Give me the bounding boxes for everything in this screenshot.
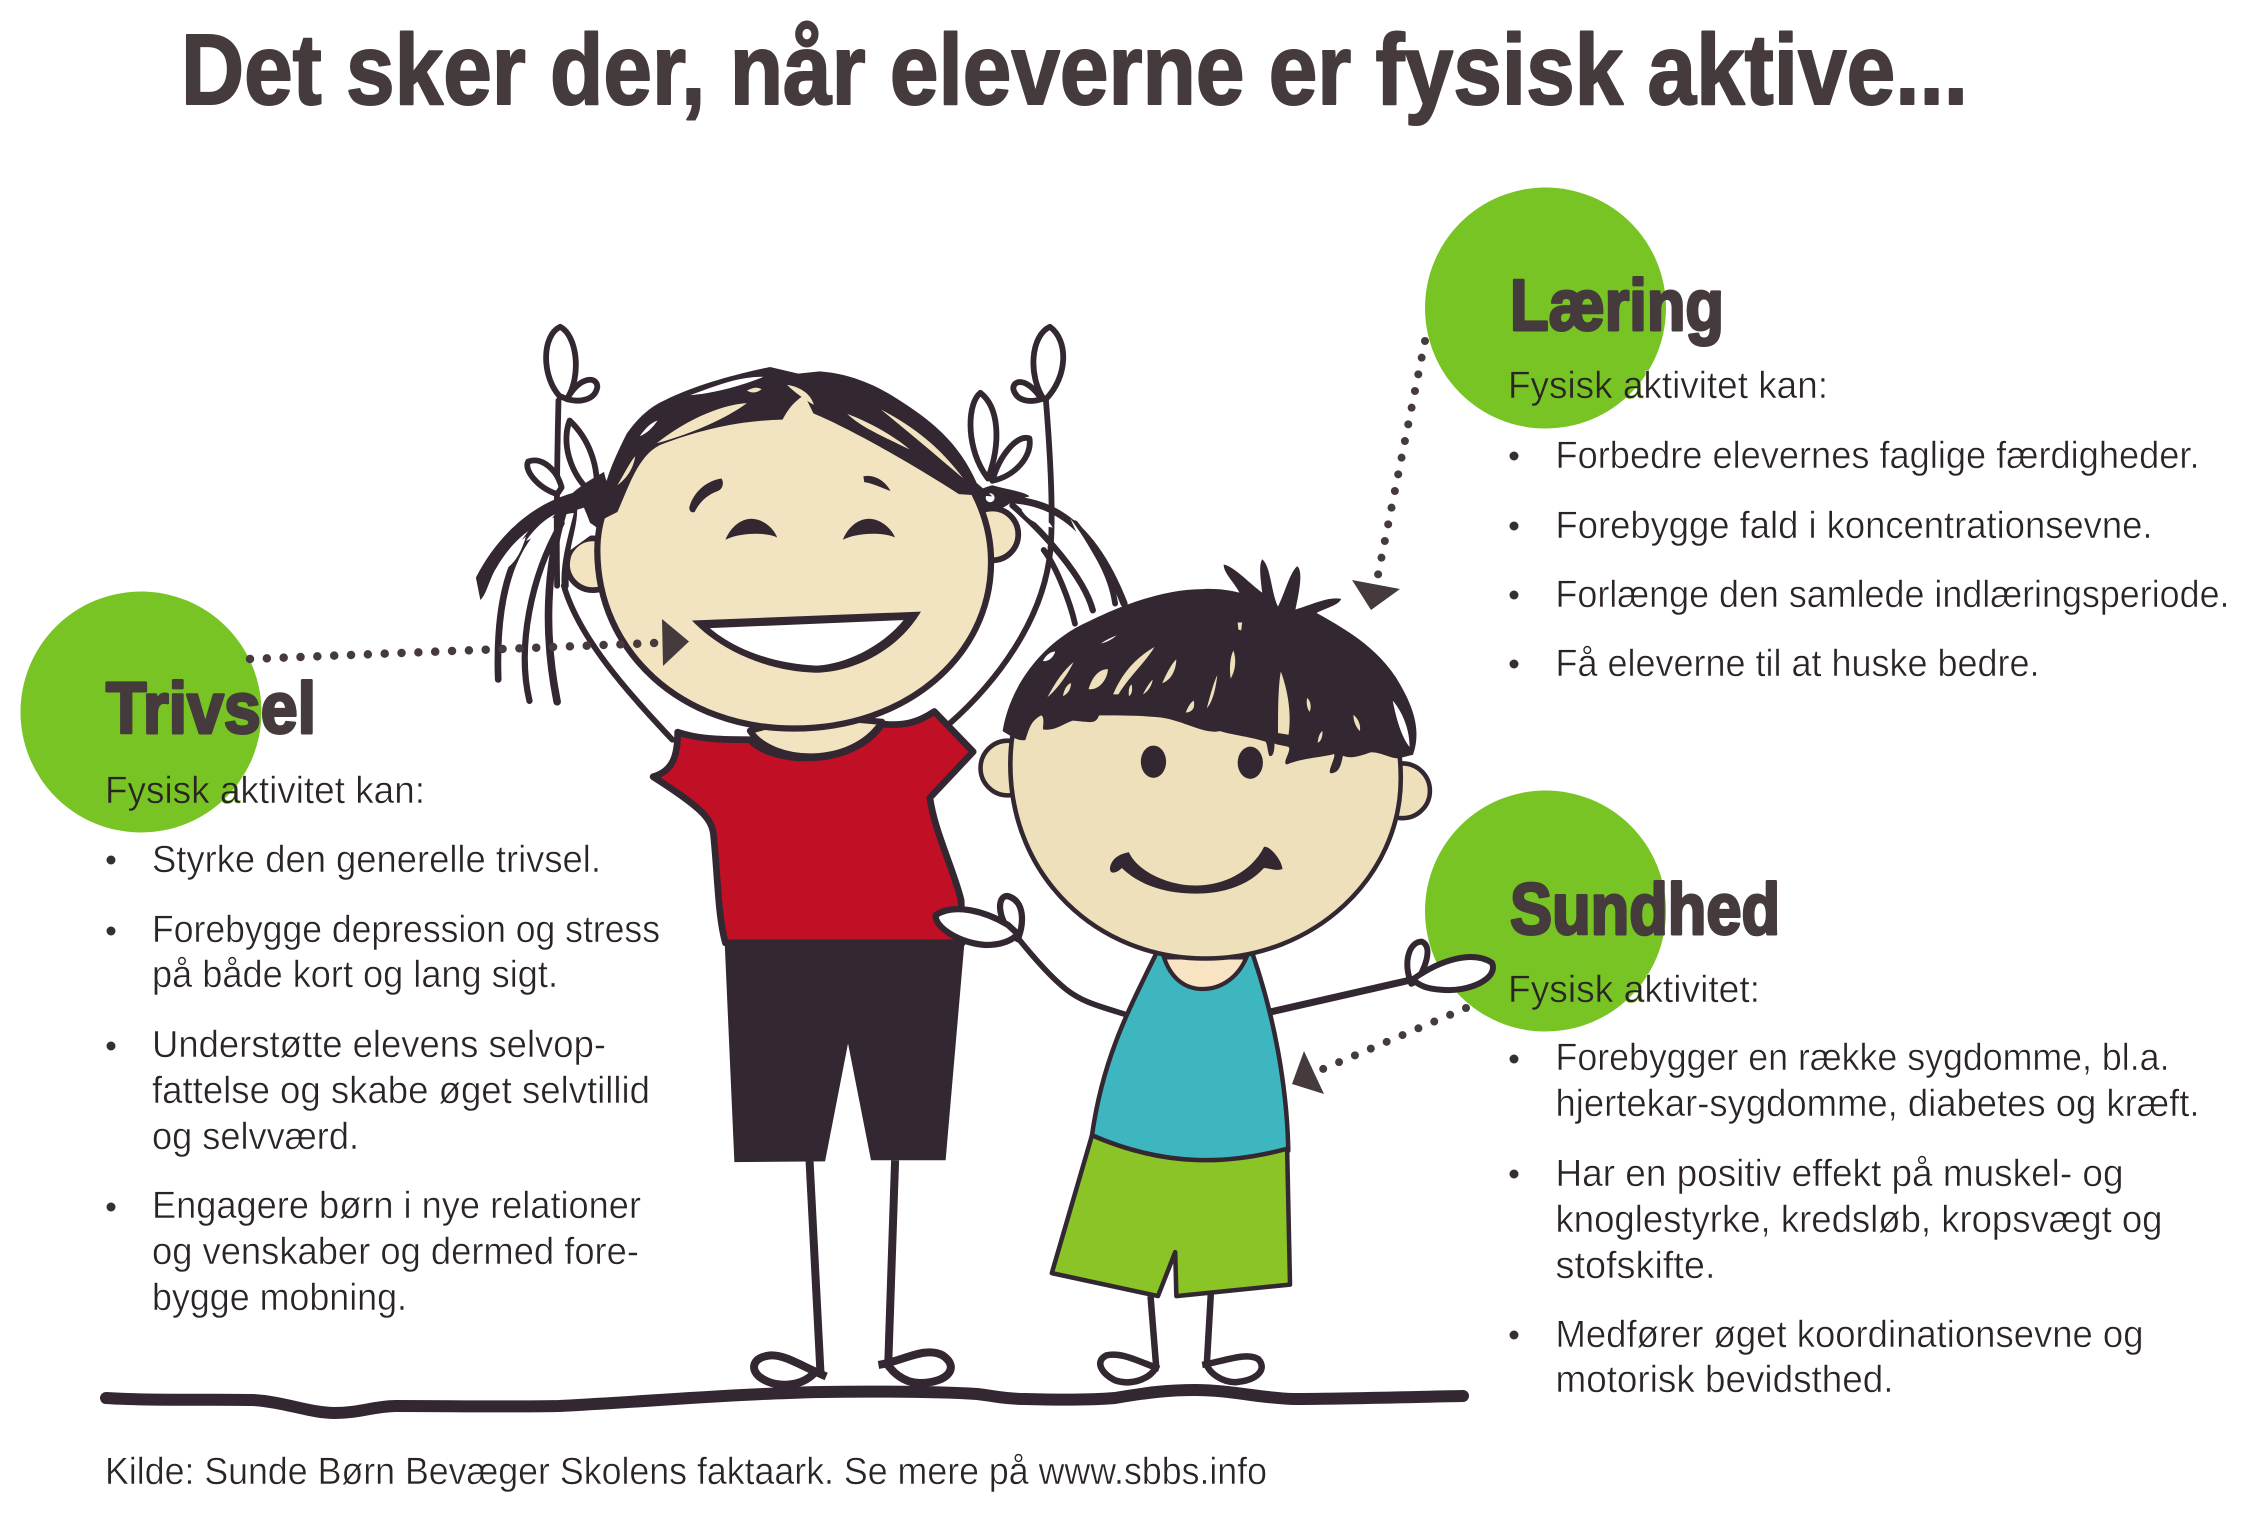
list: Trivsel: Engagere børn i nye relationer — [152, 1185, 641, 1227]
list: Trivsel: på både kort og lang sigt. — [152, 954, 558, 996]
boy smile — [1110, 847, 1283, 894]
illustration: feet and boy legs — [754, 1294, 1262, 1385]
arrow: Læring to boy — [1352, 341, 1425, 610]
list: Sundhed: Har en positiv effekt på muskel- og — [1556, 1153, 2124, 1195]
arrow: Sundhed to boy — [1292, 1008, 1466, 1094]
list: Trivsel: bygge mobning. — [152, 1277, 407, 1319]
heading: Læring: Læring — [1510, 266, 1724, 346]
girl ears — [567, 508, 1018, 590]
list: Læring: Få eleverne til at huske bedre. — [1556, 643, 2040, 685]
illustration: girl — [476, 327, 1124, 943]
boy ears — [981, 741, 1430, 818]
list: Læring: Forebygge fald i koncentrationsevne. — [1556, 505, 2152, 547]
circle: Trivsel — [20, 592, 262, 832]
boy right hand — [1407, 942, 1493, 990]
illustration: girl shorts and legs — [725, 941, 965, 1373]
list: Sundhed: stofskifte. — [1556, 1245, 1716, 1287]
intro: Trivsel: Fysisk aktivitet kan: — [105, 770, 425, 812]
list: Trivsel: og venskaber og dermed fore- — [152, 1231, 639, 1273]
girl pigtail knots — [476, 472, 1106, 600]
list: Trivsel — [152, 839, 660, 1319]
boy hair — [1003, 559, 1416, 773]
intro: Læring: Fysisk aktivitet kan: — [1508, 365, 1828, 407]
list: Trivsel: og selvværd. — [152, 1116, 359, 1158]
list: Sundhed — [1556, 1037, 2200, 1401]
list: Trivsel: fattelse og skabe øget selvtillid — [152, 1070, 650, 1112]
list: Trivsel: Styrke den generelle trivsel. — [152, 839, 601, 881]
girl mouth — [692, 612, 921, 673]
list: Sundhed: hjertekar-sygdomme, diabetes og kræft. — [1556, 1083, 2200, 1125]
girl neck — [750, 715, 882, 756]
heading: Sundhed: Sundhed — [1510, 870, 1780, 950]
list: Trivsel: Forebygge depression og stress — [152, 909, 660, 951]
girl face — [689, 476, 895, 540]
text block: Læring — [1508, 266, 2230, 685]
boy eyes — [1141, 746, 1263, 779]
list: Læring: Forbedre elevernes faglige færdigheder. — [1556, 435, 2200, 477]
girl shirt — [653, 712, 973, 943]
girl hair — [603, 367, 992, 519]
bullets: Trivsel — [106, 856, 116, 1212]
boy left hand — [936, 896, 1022, 945]
list: Læring — [1556, 435, 2230, 685]
illustration: ground line — [106, 1390, 1463, 1413]
girl head — [597, 385, 991, 729]
boy shirt — [1052, 938, 1290, 1296]
intro: Sundhed: Fysisk aktivitet: — [1508, 969, 1760, 1011]
bullets: Sundhed — [1510, 1054, 1518, 1340]
boy hair highlights — [1048, 622, 1360, 743]
list: Sundhed: Forebygger en række sygdomme, bl.a. — [1556, 1037, 2170, 1079]
title: Det sker der, når eleverne er fysisk aktive... — [181, 14, 1968, 126]
circle: Sundhed — [1425, 790, 1666, 1032]
arrow: Trivsel to girl — [250, 619, 689, 666]
bullets: Læring — [1510, 452, 1518, 668]
list: Sundhed: knoglestyrke, kredsløb, kropsvægt og — [1556, 1199, 2162, 1241]
source line: Kilde: Sunde Børn Bevæger Skolens faktaark. Se mere på www.sbbs.info — [105, 1451, 1267, 1493]
boy head shape — [1010, 610, 1401, 959]
illustration: boy — [936, 559, 1493, 1296]
heading: Trivsel: Trivsel — [106, 669, 316, 749]
text block: Sundhed — [1508, 870, 2200, 1401]
boy shorts — [1052, 1135, 1290, 1296]
boy head group — [981, 559, 1493, 990]
list: Sundhed: Medfører øget koordinationsevne og — [1556, 1314, 2144, 1356]
boy neck — [1164, 957, 1246, 989]
list: Trivsel: Understøtte elevens selvop- — [152, 1024, 606, 1066]
boy arms (behind body) — [1017, 936, 1410, 1017]
list: Sundhed: motorisk bevidsthed. — [1556, 1359, 1894, 1401]
girl arms, pigtails and bows — [498, 327, 1124, 740]
text block: Trivsel — [105, 669, 660, 1319]
circle: Læring — [1425, 188, 1666, 428]
